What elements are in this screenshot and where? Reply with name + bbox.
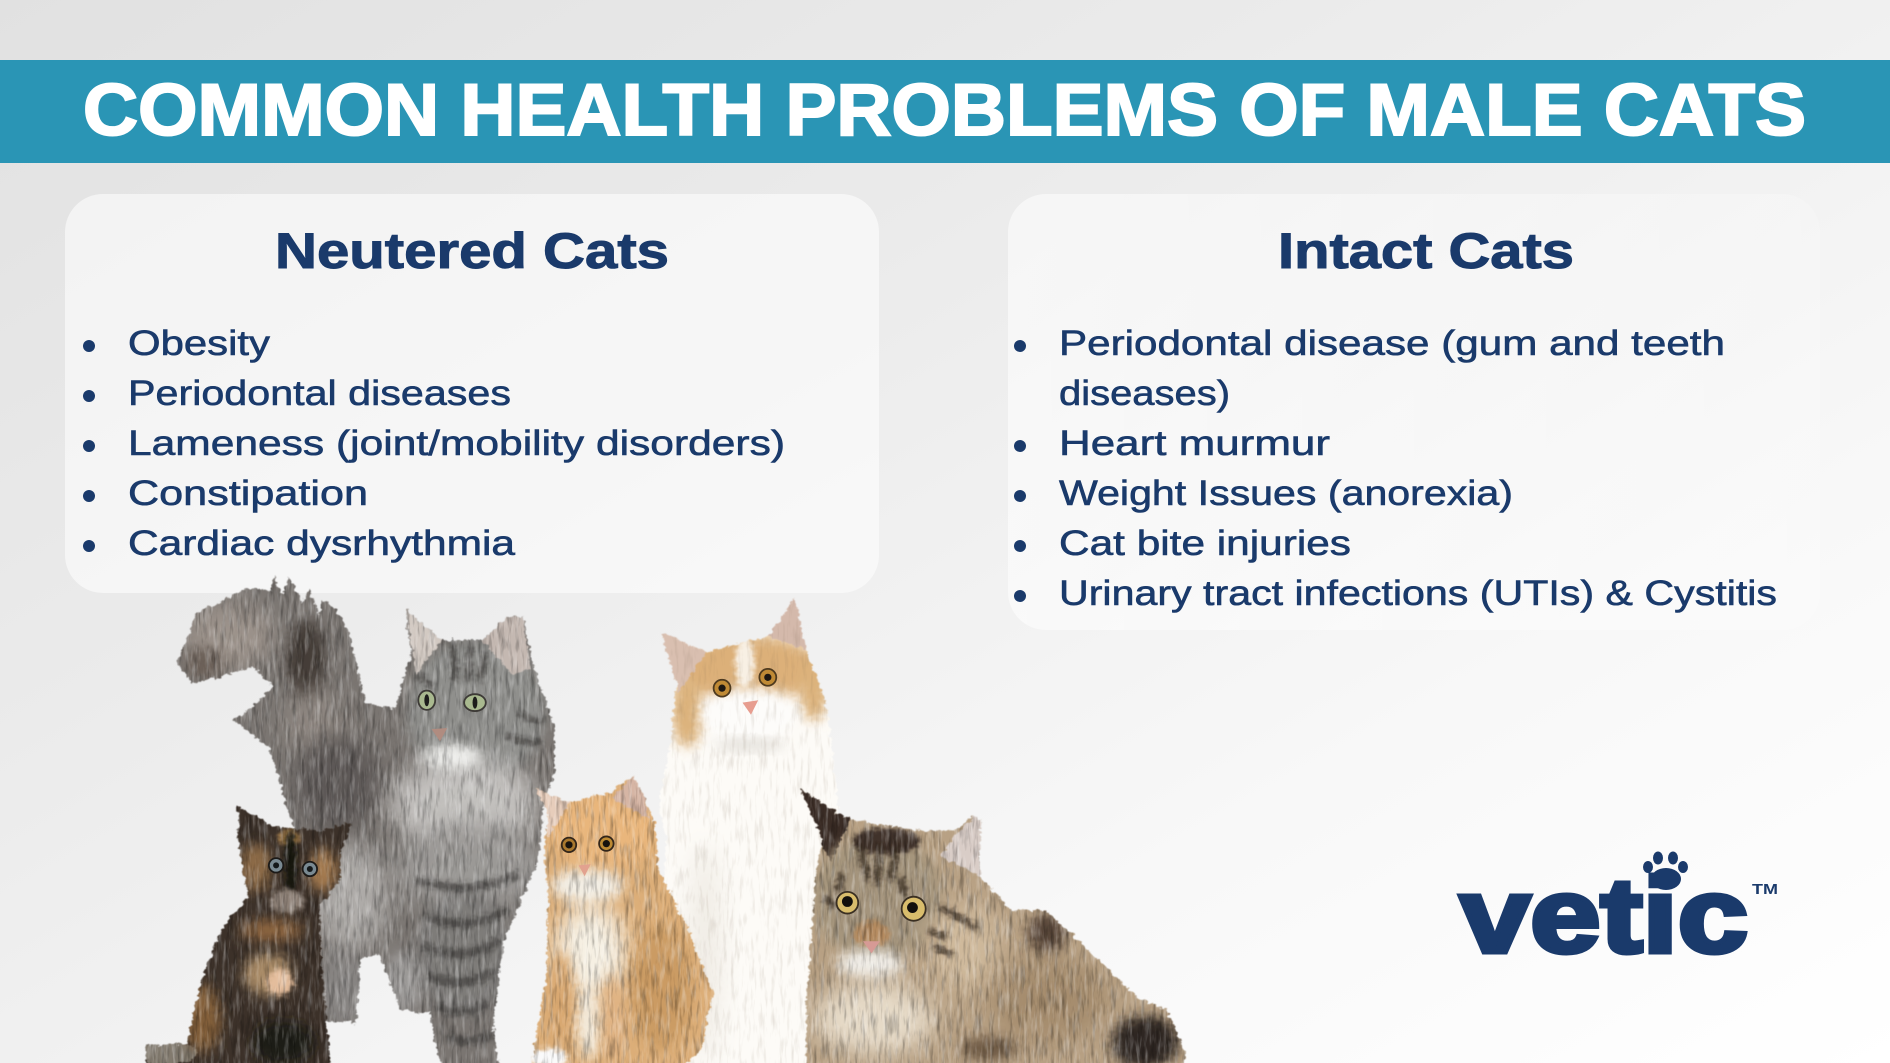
trademark: TM (1752, 881, 1778, 898)
title banner (0, 60, 1890, 163)
list: intact cats problems: Cat bite injuries (1059, 524, 1351, 563)
cat: white and orange (660, 598, 838, 1063)
eyes (837, 892, 926, 953)
icon: paw (1643, 852, 1688, 890)
logo: vetic (1460, 852, 1778, 975)
list: neutered cats problems: Constipation (128, 474, 368, 513)
heading: neutered cats: Neutered Cats (275, 223, 669, 279)
heading: intact cats: Intact Cats (1278, 223, 1574, 279)
cat: tortoiseshell kitten (144, 805, 352, 1063)
title: COMMON HEALTH PROBLEMS OF MALE CATS (83, 70, 1806, 151)
list: neutered cats problems: Obesity (128, 324, 271, 363)
wordmark: vetic (1460, 857, 1748, 975)
list: neutered cats problems (83, 324, 785, 563)
list: neutered cats problems: Lameness (joint/mobility disorders) (128, 424, 785, 463)
list: intact cats problems (1014, 324, 1777, 613)
cat: brown tabby lying down (796, 783, 1193, 1063)
cat: grey long-haired (176, 575, 557, 1063)
list: intact cats problems: Weight Issues (anorexia) (1059, 474, 1513, 513)
panel: neutered cats (65, 194, 879, 593)
illustration: group of five cats (144, 575, 1187, 1063)
eyes (418, 691, 486, 741)
list: neutered cats problems: Periodontal diseases (128, 374, 511, 413)
panel: intact cats (1008, 194, 1820, 630)
cat: ginger kitten (531, 776, 715, 1063)
list: intact cats problems: diseases) (1059, 374, 1230, 413)
eyes (269, 858, 317, 876)
eyes (562, 836, 614, 876)
list: neutered cats problems: Cardiac dysrhythmia (128, 524, 516, 563)
list: intact cats problems: Urinary tract infections (UTIs) & Cystitis (1059, 574, 1777, 613)
eyes (714, 669, 776, 715)
list: intact cats problems: Heart murmur (1059, 424, 1330, 463)
list: intact cats problems: Periodontal disease (gum and teeth (1059, 324, 1725, 363)
